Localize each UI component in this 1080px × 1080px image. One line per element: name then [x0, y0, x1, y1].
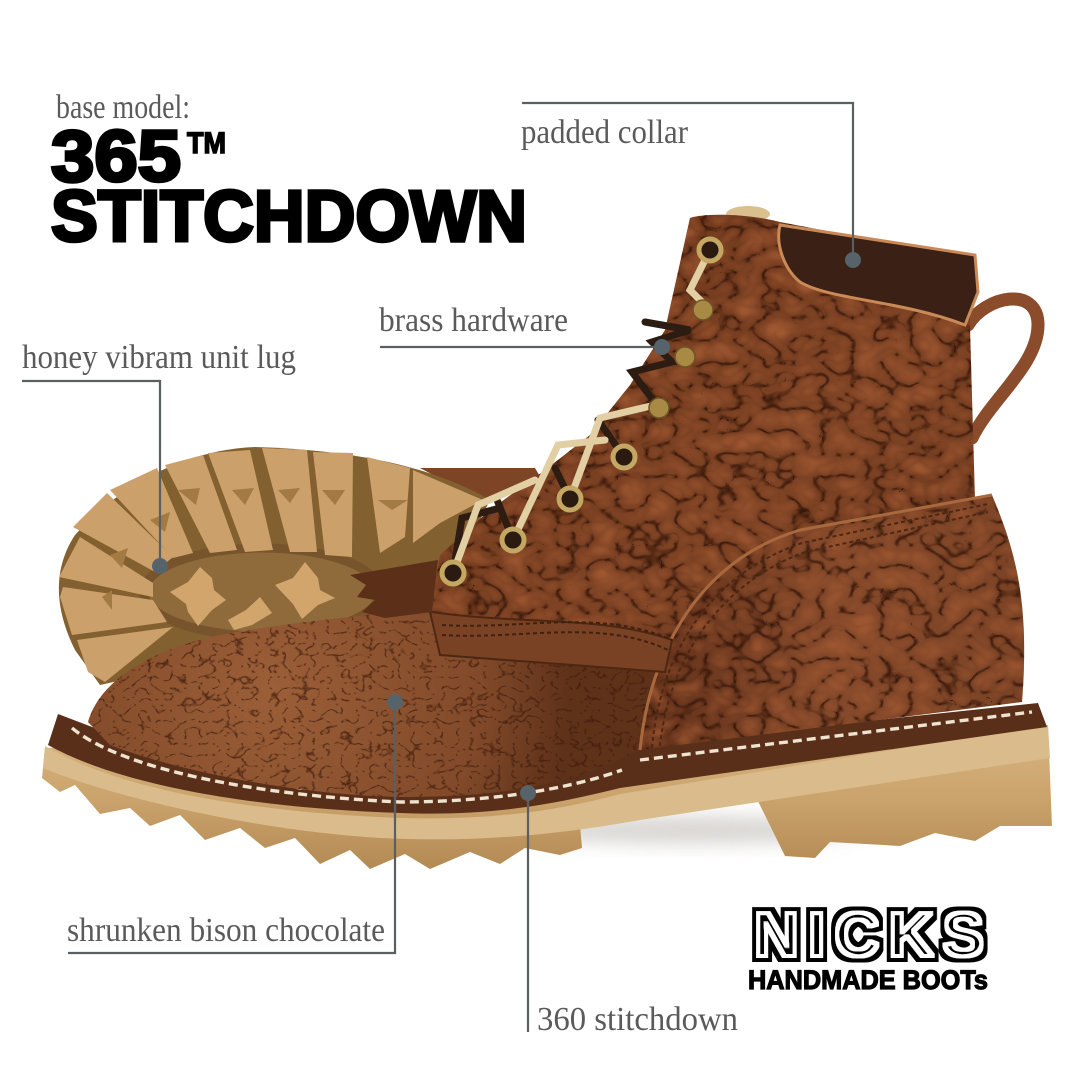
- tread lugs: [59, 448, 483, 682]
- callout: honey vibram unit lug: [22, 339, 296, 574]
- shadow under arch: [520, 816, 860, 844]
- welt: [48, 703, 1047, 814]
- brass studs: [649, 300, 713, 418]
- logo wordmark: NICKS: [754, 901, 984, 970]
- marker: [520, 785, 536, 801]
- title: [51, 117, 527, 257]
- logo tagline: HANDMADE BOOTs: [748, 965, 988, 995]
- marker: [654, 339, 670, 355]
- logo: [748, 901, 988, 995]
- base model label: base model:: [56, 89, 190, 126]
- marker: [152, 558, 168, 574]
- eyelets: [442, 239, 721, 584]
- waist: [144, 548, 380, 636]
- midsole band: [43, 725, 1050, 839]
- label: 360 stitchdown: [537, 1001, 738, 1038]
- cross-shaped lugs: [170, 562, 335, 630]
- shaft: [430, 215, 975, 650]
- outsole tread of second boot: [59, 447, 490, 685]
- leader line: [22, 381, 160, 566]
- label: padded collar: [521, 114, 689, 151]
- toe vamp: [88, 607, 665, 797]
- leader line: [380, 346, 662, 348]
- laces: [453, 250, 710, 573]
- outsole and midsole: [42, 725, 1052, 869]
- rear quarter: [640, 495, 1024, 750]
- boot: [42, 206, 1052, 869]
- leader line: [68, 702, 395, 953]
- sole base: [59, 447, 490, 685]
- callout: brass hardware: [379, 302, 670, 355]
- label: brass hardware: [379, 302, 568, 339]
- callout: shrunken bison chocolate: [67, 694, 403, 953]
- second boot upper behind sole: [420, 468, 545, 500]
- pull loop: [968, 299, 1038, 438]
- marker: [387, 694, 403, 710]
- trademark: TM: [187, 127, 226, 160]
- callout: 360 stitchdown: [520, 785, 738, 1038]
- label: honey vibram unit lug: [22, 339, 296, 376]
- kiltie fringe: [350, 560, 438, 618]
- title line 365: 365: [51, 117, 181, 197]
- label: shrunken bison chocolate: [67, 912, 385, 949]
- marker: [845, 252, 861, 268]
- stitching: [72, 712, 1032, 802]
- leader line: [527, 793, 529, 1032]
- quarter seam: [640, 495, 992, 750]
- lace stay band: [430, 612, 672, 672]
- sheepskin lining: [726, 206, 770, 222]
- toe texture: [90, 610, 650, 797]
- lug notches: [102, 488, 408, 610]
- callout: padded collar: [521, 103, 861, 268]
- leader line: [522, 103, 853, 260]
- title line stitchdown: STITCHDOWN: [51, 177, 527, 257]
- shaft texture: [430, 210, 990, 660]
- rear texture: [636, 490, 1031, 755]
- padded collar: [779, 225, 978, 325]
